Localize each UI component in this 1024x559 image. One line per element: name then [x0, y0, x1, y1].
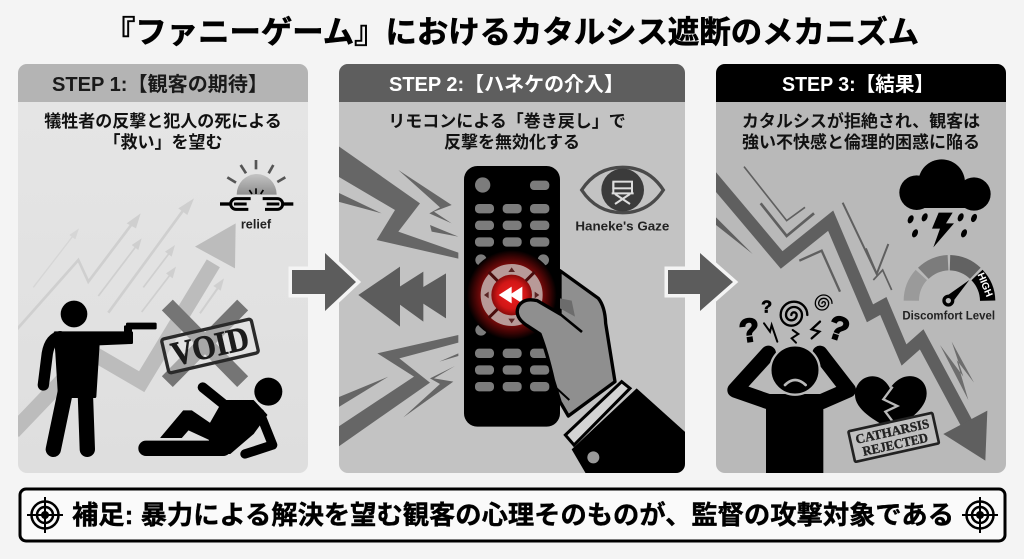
- lightning shards bottom: [338, 335, 458, 447]
- step 3 description: 強い不快感と倫理的困惑に陥る: [742, 132, 980, 152]
- icon: storm cloud: [899, 159, 991, 247]
- icon: confused person silhouette: [735, 345, 848, 477]
- step 3 header bar: [716, 64, 1006, 102]
- arrow: step 1 to step 2: [292, 253, 356, 311]
- step 2 header bar: [339, 64, 685, 102]
- icon: gunman silhouette: [43, 301, 155, 449]
- icon: Haneke's Gaze eye: Haneke's Gaze: [575, 219, 669, 233]
- icon: target left: [27, 497, 63, 533]
- step 1 description: 「救い」を望む: [104, 133, 222, 152]
- step 3 description: カタルシスが拒絶され、観客は: [742, 111, 980, 131]
- icon: question marks, spirals and sparks: ?: [823, 309, 854, 350]
- gauge: Discomfort Level: [902, 263, 995, 322]
- arrow: step 2 to step 3: [668, 253, 733, 311]
- icon: hand pressing rewind: [517, 271, 687, 475]
- step 1 description: [44, 111, 282, 152]
- stamp: CATHARSIS REJECTED: [848, 413, 939, 462]
- icon: remote control: [464, 166, 560, 427]
- step 3 description: [742, 111, 980, 152]
- gauge: Discomfort Level: Discomfort Level: [902, 308, 995, 322]
- falling jagged arrow: [710, 167, 987, 461]
- step 1 header bar: [18, 64, 308, 102]
- icon: crossed-out X: [167, 305, 243, 382]
- step 3 illustration: [710, 159, 995, 477]
- icon: fallen victim silhouette: [146, 378, 282, 454]
- step 2 description: [388, 112, 626, 152]
- rising arrows background: [13, 198, 236, 432]
- step 3 heading: STEP 3:【結果】: [782, 73, 934, 96]
- panel: step 3 result: [710, 64, 1006, 477]
- stamp: CATHARSIS REJECTED: REJECTED: [861, 430, 929, 459]
- step 2 heading: STEP 2:【ハネケの介入】: [389, 73, 624, 96]
- icon: glowing rewind button: [467, 250, 557, 340]
- rewind arrows: [358, 267, 446, 327]
- step 1 description: 犠牲者の反撃と犯人の死による: [44, 111, 282, 131]
- icon: question marks, spirals and sparks: ?: [761, 297, 772, 317]
- step 1 illustration: [13, 160, 293, 454]
- stamp: CATHARSIS REJECTED: CATHARSIS: [854, 416, 931, 447]
- sleeve button: [587, 451, 599, 463]
- shirt cuff: [565, 382, 630, 445]
- panel: step 1 audience expectation: [13, 64, 308, 473]
- title: 『ファニーゲーム』におけるカタルシス遮断のメカニズム: [104, 15, 919, 50]
- stamp: VOID: VOID: [168, 320, 253, 374]
- icon: broken heart: [855, 376, 927, 423]
- suit sleeve: [572, 388, 687, 475]
- icon: broken chain and sun, relief: relief: [241, 218, 272, 232]
- step 2 illustration: [338, 146, 687, 475]
- icon: Haneke's Gaze eye: [575, 167, 669, 233]
- icon: question marks, spirals and sparks: [739, 294, 850, 344]
- icon: broken chain and sun, relief: [220, 160, 293, 232]
- step 1 heading: STEP 1:【観客の期待】: [52, 73, 268, 96]
- gauge: Discomfort Level: HIGH: [975, 271, 994, 299]
- step 2 description: リモコンによる「巻き戻し」で: [388, 112, 626, 131]
- note text: 補足: 暴力による解決を望む観客の心理そのものが、監督の攻撃対象である: [72, 500, 954, 530]
- icon: target right: [962, 497, 998, 533]
- panel: step 2 Haneke's intervention: [338, 64, 687, 475]
- lightning shards top: [338, 146, 458, 259]
- callout: supplementary note: [20, 489, 1005, 541]
- step 2 description: 反撃を無効化する: [444, 133, 580, 152]
- icon: question marks, spirals and sparks: ?: [737, 311, 762, 351]
